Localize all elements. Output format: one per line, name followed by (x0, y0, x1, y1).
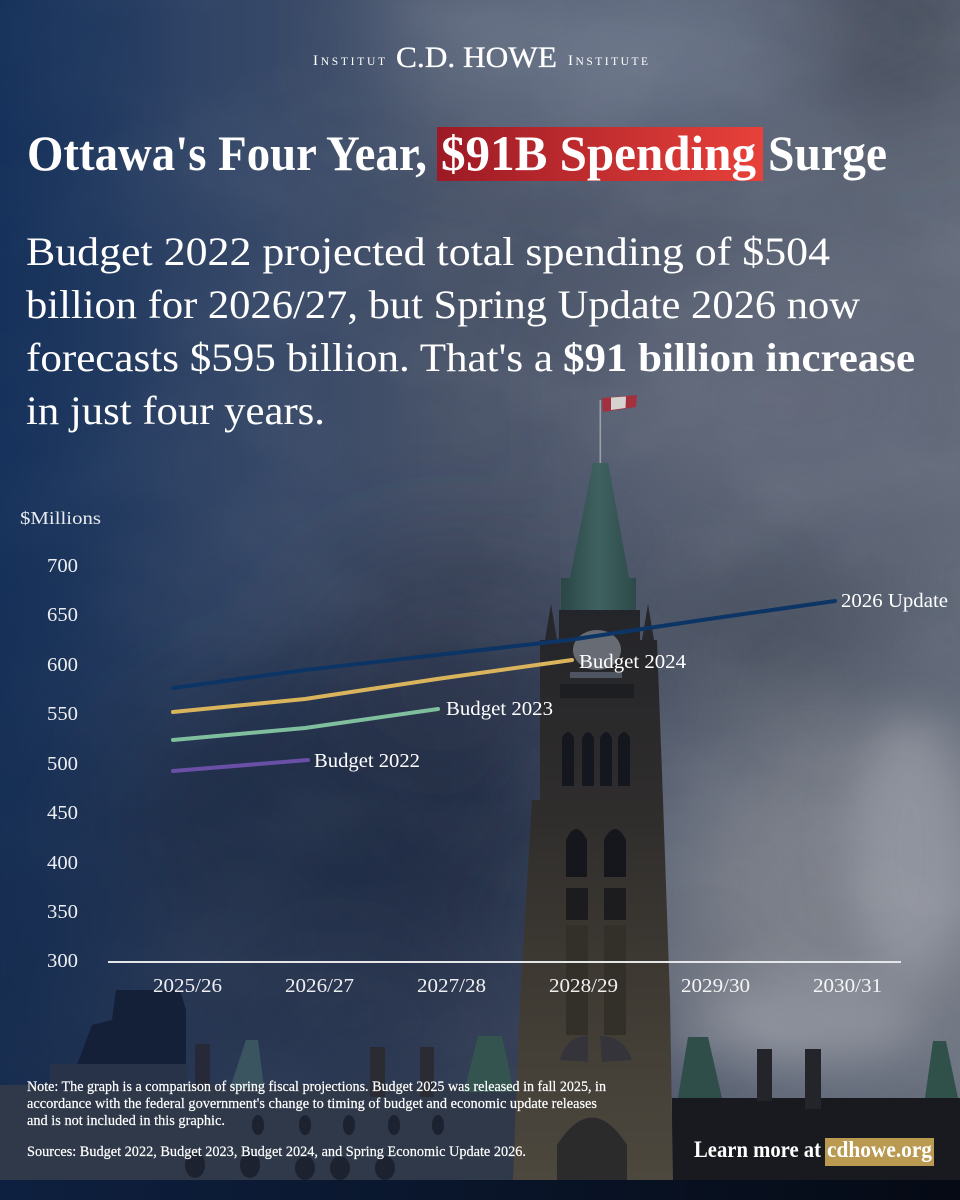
intro text block (26, 229, 915, 433)
title: $91B Spending (441, 125, 756, 181)
title: Ottawa's Four Year, (27, 125, 427, 181)
logo: C.D. Howe Institute wordmark: INSTITUT (313, 53, 385, 69)
x axis labels: 2027/28 (417, 975, 486, 997)
series: 2026 Update: 2026 Update (841, 590, 948, 612)
series: 2026 Update (173, 590, 948, 688)
title highlight (437, 127, 763, 181)
y axis labels: 700 (47, 555, 78, 577)
footnote: Note: The graph is a comparison of spring fiscal projections. Budget 2025 was released in fall 2025, in (27, 1079, 607, 1095)
title (27, 125, 887, 181)
footnote: and is not included in this graphic. (27, 1113, 225, 1129)
call to action (694, 1137, 934, 1166)
x axis labels (153, 975, 882, 997)
series: Budget 2024: Budget 2024 (579, 651, 686, 673)
y axis labels: 600 (47, 654, 78, 676)
intro text block: Budget 2022 projected total spending of $504 (26, 229, 830, 274)
series: Budget 2022 (173, 750, 420, 772)
bottom band (0, 1180, 960, 1200)
title: Surge (768, 125, 887, 181)
logo: C.D. Howe Institute wordmark (313, 41, 648, 74)
series: Budget 2024 (173, 651, 686, 712)
gold url box (825, 1138, 934, 1166)
intro text block: in just four years. (26, 388, 325, 433)
series: Budget 2023: Budget 2023 (446, 698, 553, 720)
series: Budget 2022: Budget 2022 (314, 750, 420, 772)
series: Budget 2023 (173, 698, 553, 740)
intro text block: billion for 2026/27, but Spring Update 2026 now (26, 282, 860, 327)
intro text block: $91 billion increase (563, 335, 915, 380)
y axis title: $Millions (20, 508, 101, 528)
footnote: Sources: Budget 2022, Budget 2023, Budget 2024, and Spring Economic Update 2026. (27, 1144, 526, 1160)
y axis labels: 300 (47, 950, 78, 972)
call to action: cdhowe.org (827, 1137, 932, 1162)
x axis labels: 2028/29 (549, 975, 618, 997)
icon: Canadian flag on pole (600, 395, 637, 463)
x axis labels: 2026/27 (285, 975, 354, 997)
y axis labels: 500 (47, 753, 78, 775)
logo: C.D. Howe Institute wordmark: INSTITUTE (568, 53, 648, 69)
call to action: Learn more at (694, 1137, 821, 1162)
y axis labels (47, 555, 78, 972)
y axis labels: 650 (47, 604, 78, 626)
y axis labels: 550 (47, 703, 78, 725)
y axis labels: 400 (47, 852, 78, 874)
logo: C.D. Howe Institute wordmark: C.D. HOWE (396, 41, 557, 74)
intro text block: forecasts $595 billion. That's a (26, 335, 553, 380)
x axis labels: 2029/30 (681, 975, 750, 997)
x axis labels: 2030/31 (813, 975, 882, 997)
x axis labels: 2025/26 (153, 975, 222, 997)
y axis labels: 450 (47, 802, 78, 824)
x axis line (108, 961, 901, 963)
y axis labels: 350 (47, 901, 78, 923)
footnote (27, 1079, 607, 1160)
footnote: accordance with the federal government's change to timing of budget and economic update releases (27, 1096, 597, 1112)
background: Peace Tower (513, 395, 673, 1180)
line chart: spending projections (20, 508, 948, 997)
background: Parliament roofline (0, 990, 960, 1180)
